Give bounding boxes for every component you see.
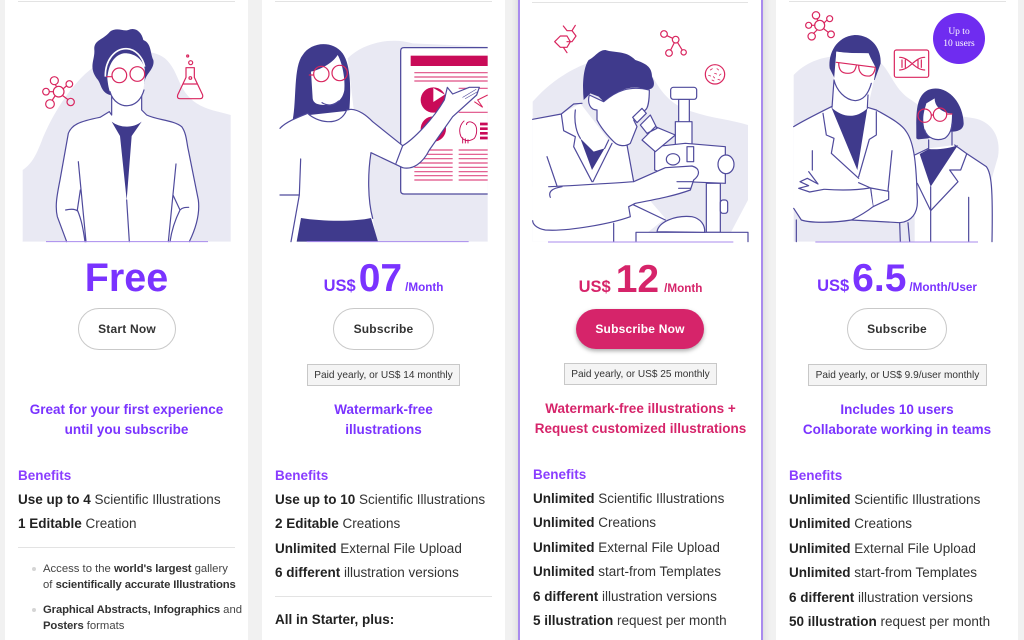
panel: US$ 12 featured plan: 5 illustration request per month bbox=[533, 613, 727, 628]
icon: microscope bbox=[633, 87, 748, 242]
icon: DNA card bbox=[894, 50, 929, 77]
button: Subscribe Now: Subscribe Now bbox=[595, 322, 685, 336]
illustration: two scientists bbox=[793, 11, 998, 242]
panel: US$ 12 featured plan: Unlimited start-from Templates bbox=[533, 564, 721, 579]
button: Subscribe: Subscribe bbox=[354, 322, 413, 336]
price: US$ 07 /Month: US$07 /Month bbox=[324, 257, 443, 300]
button: Subscribe: Subscribe bbox=[867, 322, 927, 336]
tagline: Great for your first experience bbox=[30, 402, 223, 417]
benefit rows: Unlimited Scientific Illustrations bbox=[789, 492, 980, 507]
panel: Free plan: 1 Editable Creation bbox=[18, 516, 137, 531]
heading: Benefits: Benefits bbox=[18, 468, 71, 483]
tagline bbox=[803, 402, 991, 437]
benefit rows: Unlimited Scientific Illustrations bbox=[533, 491, 724, 506]
icon: flask bbox=[177, 55, 203, 99]
panel: US$ 12 featured plan: Unlimited External File Upload bbox=[533, 540, 720, 555]
button: Subscribe bbox=[333, 308, 434, 350]
note: paid yearly: Paid yearly, or US$ 14 monthly bbox=[314, 370, 453, 381]
bullet: gallery access: Access to the world's largest gallery bbox=[43, 563, 228, 575]
panel: US$ 6.5 team plan bbox=[776, 0, 1018, 640]
tagline: Watermark-free illustrations + bbox=[545, 401, 736, 416]
subheading: All in Starter, plus: All in Starter, plus: bbox=[275, 612, 394, 627]
illustration: scientist at microscope bbox=[532, 24, 749, 242]
bullet: gallery access: of scientifically accurate Illustrations bbox=[43, 578, 236, 590]
illustration: woman scientist in lab coat bbox=[22, 29, 230, 242]
badge: up to 10 users: 10 users bbox=[943, 39, 975, 49]
panel: US$ 6.5 team plan: 6 different illustration versions bbox=[789, 590, 973, 605]
panel: US$ 12 featured plan bbox=[520, 0, 761, 640]
panel: US$ 07 plan: 6 different illustration versions bbox=[275, 565, 459, 580]
panel: US$ 6.5 team plan: Unlimited External File Upload bbox=[789, 541, 976, 556]
panel: US$ 07 plan bbox=[262, 0, 505, 640]
note: paid yearly: Paid yearly, or US$ 9.9/user monthly bbox=[816, 370, 979, 381]
panel: US$ 6.5 team plan: Unlimited start-from Templates bbox=[789, 565, 977, 580]
tagline bbox=[30, 402, 223, 437]
panel: US$ 6.5 team plan: 50 illustration request per month bbox=[789, 614, 990, 629]
tagline: Includes 10 users bbox=[840, 402, 954, 417]
icon: hexagon molecule bbox=[555, 25, 576, 53]
benefit rows: Use up to 10 Scientific Illustrations bbox=[275, 492, 485, 507]
panel: US$ 12 featured plan: 6 different illustration versions bbox=[533, 589, 717, 604]
panel: US$ 12 featured plan: Unlimited Creations bbox=[533, 515, 656, 530]
benefit rows: Use up to 4 Scientific Illustrations bbox=[18, 492, 221, 507]
badge: up to 10 users bbox=[933, 13, 985, 64]
icon: molecule bbox=[43, 77, 74, 108]
bullet: gallery access bbox=[43, 563, 236, 590]
tagline bbox=[334, 402, 433, 437]
tagline bbox=[535, 401, 746, 436]
price: US$ 6.5 /Month/User: US$6.5 /Month/User bbox=[817, 257, 977, 300]
panel: US$ 07 plan: 2 Editable Creations bbox=[275, 516, 400, 531]
note: paid yearly bbox=[564, 363, 717, 385]
tagline: until you subscribe bbox=[65, 422, 188, 437]
price: US$ 12 /Month: US$12 /Month bbox=[579, 258, 702, 301]
panel: US$ 07 plan: Unlimited External File Upload bbox=[275, 541, 462, 556]
bullet: formats: Graphical Abstracts, Infographics and bbox=[43, 604, 242, 616]
tagline: Watermark-free bbox=[334, 402, 433, 417]
panel: US$ 6.5 team plan: Unlimited Creations bbox=[789, 516, 912, 531]
badge: up to 10 users: Up to bbox=[948, 27, 970, 37]
bullet: formats: Posters formats bbox=[43, 620, 124, 632]
heading: Benefits: Benefits bbox=[789, 468, 842, 483]
heading: Benefits: Benefits bbox=[533, 467, 586, 482]
button: Start Now bbox=[78, 308, 176, 350]
tagline: illustrations bbox=[345, 422, 422, 437]
icon: branching molecule bbox=[661, 31, 686, 56]
panel: Free plan bbox=[5, 0, 248, 640]
heading: Benefits: Benefits bbox=[275, 468, 328, 483]
button: Subscribe bbox=[847, 308, 947, 350]
icon: molecule bbox=[806, 12, 834, 40]
tagline: Request customized illustrations bbox=[535, 421, 746, 436]
note: paid yearly: Paid yearly, or US$ 25 monthly bbox=[571, 369, 710, 380]
bullet: formats bbox=[43, 604, 242, 632]
button: Subscribe Now bbox=[576, 309, 704, 349]
tagline: Collaborate working in teams bbox=[803, 422, 991, 437]
icon: petri dish bbox=[705, 65, 725, 84]
illustration: woman presenting poster bbox=[279, 40, 488, 242]
button: Start Now: Start Now bbox=[98, 322, 156, 336]
price: Free: Free bbox=[85, 256, 168, 300]
note: paid yearly bbox=[808, 364, 987, 386]
note: paid yearly bbox=[307, 364, 460, 386]
icon: heart bbox=[460, 121, 477, 143]
